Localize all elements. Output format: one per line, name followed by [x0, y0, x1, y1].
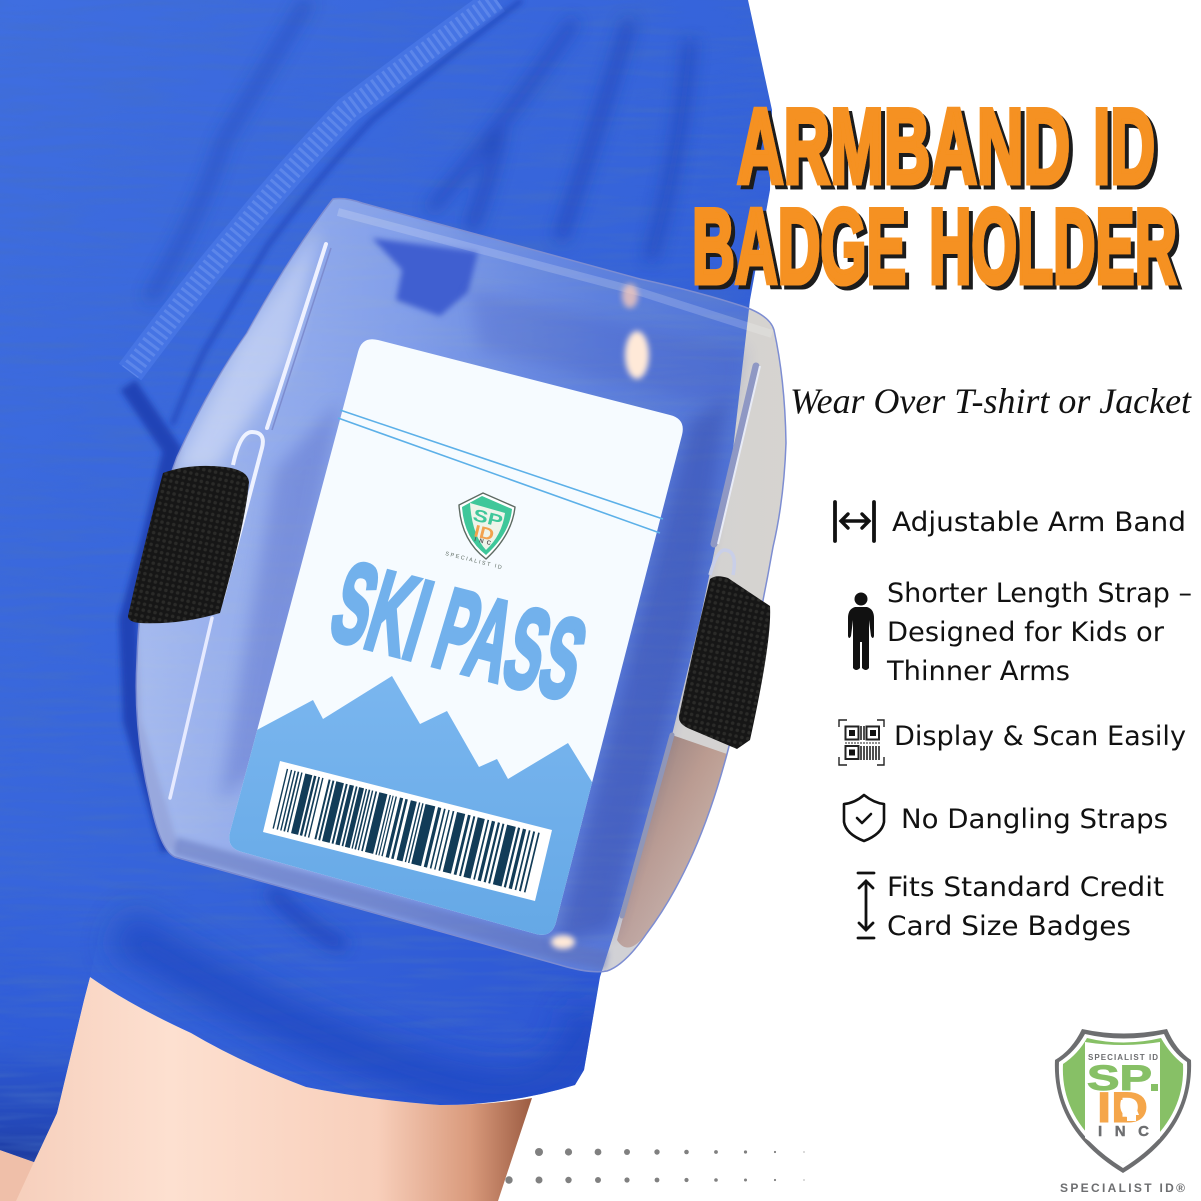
icon: shield with check	[844, 795, 884, 841]
barcode	[263, 761, 552, 901]
blue shirt	[0, 0, 800, 1201]
card stripes	[338, 410, 663, 533]
shield white band	[1059, 1034, 1187, 1168]
logo: specialist id shield: SPECIALIST ID®	[1060, 1181, 1185, 1195]
feature: fits standard credit card: Fits Standard Credit	[887, 872, 1164, 903]
left elastic strap	[128, 466, 249, 623]
mountains	[229, 676, 592, 935]
icon: width arrows	[835, 502, 874, 541]
skin below body at lower left	[0, 1148, 34, 1201]
subtitle: Wear Over T-shirt or Jacket	[790, 381, 1192, 421]
card logo: INC	[474, 537, 492, 547]
right slot lower	[622, 735, 672, 916]
holder base over white	[560, 307, 786, 971]
photo: arm wearing blue shirt with badge holder	[0, 0, 800, 1201]
logo: specialist id shield: ID	[1097, 1084, 1148, 1132]
shirt fold: left crease	[149, 0, 308, 300]
ski pass heading: SKI PASS	[319, 539, 598, 725]
shirt showing through holder	[372, 238, 478, 316]
feature: adjustable arm band	[835, 502, 1186, 541]
title: armband id badge holder	[692, 86, 1177, 306]
sleeve seam ribs	[130, 0, 497, 372]
decorative dot rows	[505, 1148, 805, 1184]
logo head icon	[1120, 1100, 1139, 1121]
fold under holder	[270, 890, 345, 945]
feature: display and scan: Display & Scan Easily	[894, 721, 1186, 752]
card logo: ID	[472, 521, 496, 545]
bottom rim of holder	[175, 846, 607, 960]
card logo: SP	[471, 505, 505, 531]
top rim of holder	[338, 212, 772, 334]
card logo: SPECIALIST ID	[445, 551, 502, 571]
sleeve seam band	[130, 0, 497, 372]
icon: qr code	[839, 720, 884, 765]
feature: no dangling straps: No Dangling Straps	[901, 804, 1168, 835]
logo: specialist id shield	[1055, 1029, 1191, 1195]
seam shadow line	[172, 0, 522, 425]
left slot loop	[222, 432, 263, 600]
feature list	[835, 502, 1192, 942]
title: armband id badge holder: BADGE	[692, 186, 906, 306]
shirt fold: arm shadow	[128, 385, 172, 850]
reflection on lower right of holder	[617, 735, 727, 948]
icon: height arrow	[858, 873, 874, 938]
logo dot	[1151, 1084, 1158, 1091]
feature: no dangling straps	[844, 795, 1168, 841]
right elastic strap	[679, 576, 770, 749]
darker band right of card	[555, 400, 728, 945]
ski pass card	[210, 339, 683, 960]
left glare	[175, 225, 320, 470]
left slot lower	[170, 618, 212, 798]
shield white centre	[1085, 1042, 1160, 1163]
card logo	[445, 493, 515, 571]
feature: shorter length strap	[848, 578, 1192, 687]
shield outer	[1055, 1029, 1191, 1173]
icon: person	[848, 592, 874, 670]
right slot loop	[710, 550, 734, 575]
feature: shorter length strap: Thinner Arms	[886, 656, 1070, 687]
transparent vinyl holder	[136, 198, 786, 972]
logo: specialist id shield: INC	[1098, 1123, 1149, 1140]
feature: shorter length strap: Shorter Length Strap –	[887, 578, 1192, 609]
right slot upper	[714, 366, 756, 544]
hem shading	[120, 930, 590, 1091]
logo text: SPECIALIST ID	[1088, 1053, 1158, 1062]
darker band above card	[470, 290, 745, 410]
title: armband id badge holder: ID	[1093, 86, 1155, 206]
logo: specialist id shield: SP	[1087, 1059, 1152, 1098]
feature: fits standard credit card: Card Size Badges	[887, 911, 1131, 942]
darker mottling left of card	[220, 400, 340, 800]
left slot upper	[267, 244, 326, 428]
body behind sleeve	[0, 977, 90, 1162]
glare: peach spots	[625, 331, 649, 379]
feature: fits standard credit card	[858, 872, 1164, 942]
feature: shorter length strap: Designed for Kids or	[887, 617, 1165, 648]
arm skin	[15, 977, 532, 1201]
shoulder vertical folds	[430, 20, 690, 260]
feature: display and scan	[839, 720, 1186, 765]
shield green	[1063, 1038, 1183, 1163]
feature: adjustable arm band: Adjustable Arm Band	[892, 507, 1186, 538]
